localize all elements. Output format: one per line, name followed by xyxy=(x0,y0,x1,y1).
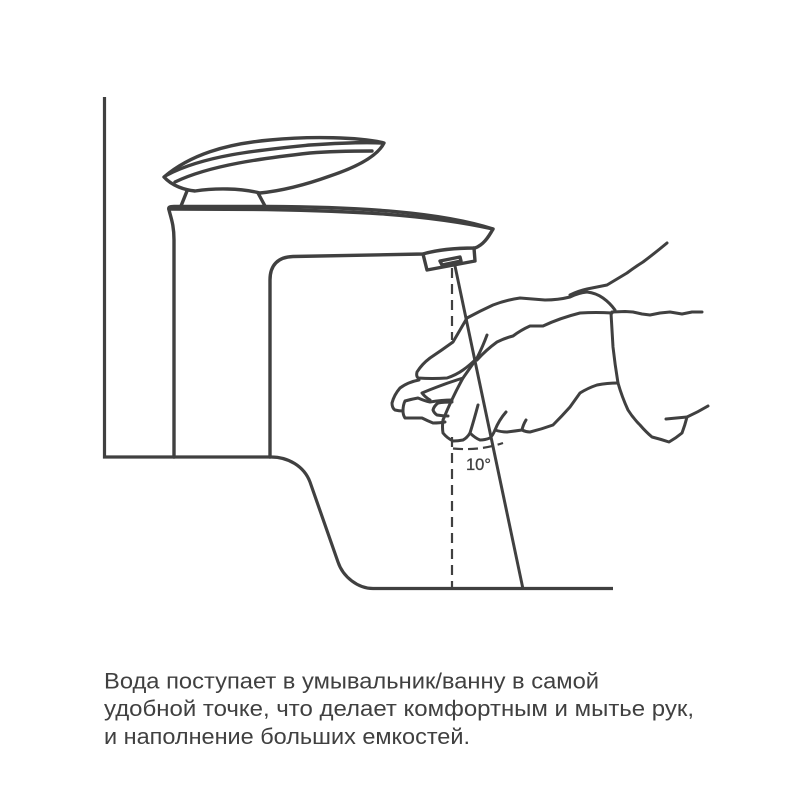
handle stem xyxy=(181,191,265,206)
water stream at 10 degree angle xyxy=(455,266,523,589)
hands xyxy=(392,243,708,442)
angle label: 10° xyxy=(466,456,491,474)
spout aerator xyxy=(423,248,475,270)
caption text xyxy=(104,668,694,749)
faucet lever handle xyxy=(164,138,384,206)
angle arc xyxy=(453,443,503,449)
faucet body and spout xyxy=(169,206,493,457)
wall and basin outline xyxy=(104,97,613,588)
caption text: удобной точке, что делает комфортным и мытье рук, xyxy=(104,696,694,721)
caption text: и наполнение больших емкостей. xyxy=(104,724,470,749)
vertical dashed reference line xyxy=(451,268,453,589)
caption text: Вода поступает в умывальник/ванну в самой xyxy=(104,668,599,694)
